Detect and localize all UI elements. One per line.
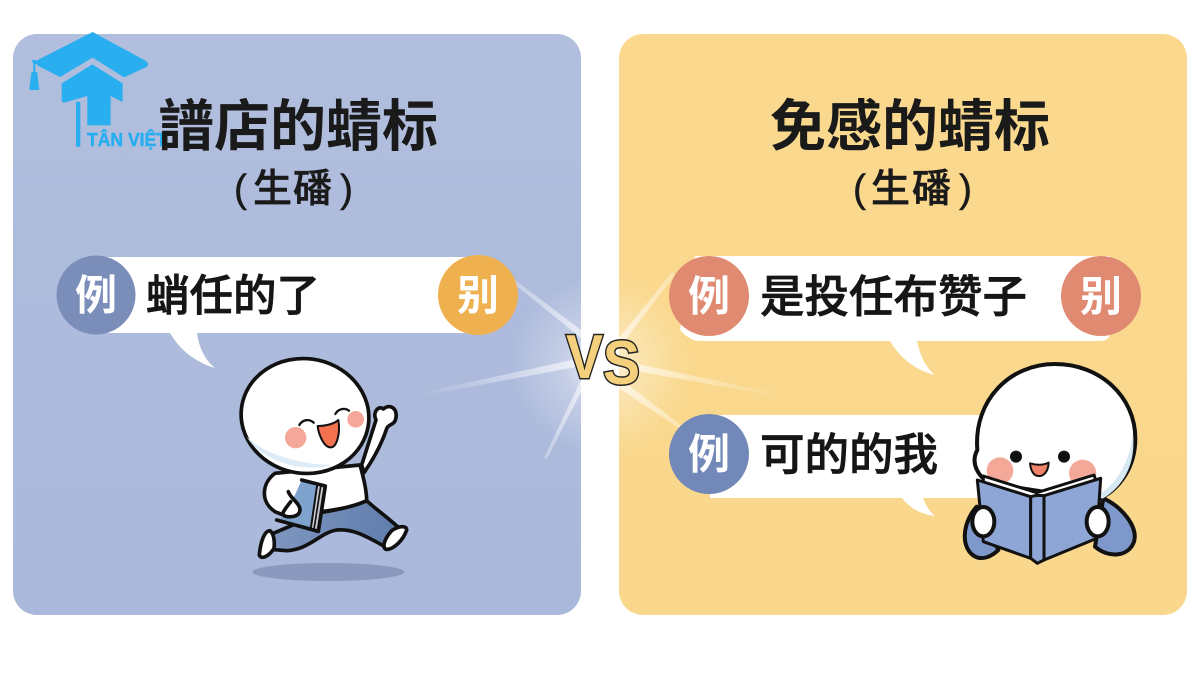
torso [264, 465, 367, 515]
label: VS: V [566, 323, 607, 392]
eyes [299, 420, 314, 425]
badge: left blue: 例 [75, 272, 117, 319]
head [975, 364, 1135, 500]
heading: left subtitle: ) [340, 168, 353, 211]
logo: Tan Viet: TÂN VIỆT [87, 129, 167, 150]
badge: left blue [56, 256, 136, 334]
badge: right red second: 别 [1080, 273, 1122, 320]
light burst behind VS [443, 272, 763, 459]
badge: right red [669, 256, 749, 336]
badge: left orange: 别 [457, 272, 499, 319]
arms [965, 507, 998, 558]
book [977, 475, 1101, 563]
callout: right top speech bubble [669, 256, 1141, 375]
badge: right red: 例 [688, 273, 730, 320]
book [277, 480, 325, 531]
shadow [252, 563, 404, 581]
head [234, 350, 376, 482]
heading: right title: 免感的蜻标 [770, 95, 1050, 158]
heading: right subtitle: 生 [871, 168, 910, 211]
badge: right red second [1061, 256, 1141, 336]
text: left bubble: 蛸任的了 [146, 273, 320, 321]
panel: left [13, 34, 581, 615]
callout: left speech bubble [56, 255, 518, 368]
heading: right subtitle: ( [853, 168, 866, 211]
heading: left subtitle: 磻 [293, 168, 332, 211]
cheeks [285, 427, 306, 448]
heading: left title: 譜店的蜻标 [158, 95, 438, 158]
trousers [270, 501, 402, 551]
heading: right subtitle: 磻 [912, 168, 951, 211]
badge: right blue: 例 [688, 431, 730, 478]
cheeks [987, 457, 1013, 484]
feet [384, 527, 407, 549]
heading: left subtitle: 生 [253, 168, 292, 211]
hands [972, 507, 994, 536]
badge: right blue [669, 414, 749, 494]
character: reading a book [965, 364, 1135, 563]
badge: left orange [438, 255, 518, 335]
text: right top bubble: 是投任布赞子 [760, 273, 1027, 322]
panel: right [619, 34, 1187, 615]
logo: Tan Viet [29, 32, 167, 150]
text: right lower bubble: 可的的我 [760, 431, 938, 480]
eyes [1011, 452, 1021, 461]
heading: left subtitle: ( [234, 168, 247, 211]
callout: right lower speech bubble [669, 414, 985, 516]
hand [283, 492, 300, 517]
character: running with book [234, 350, 407, 581]
label: VS: S [603, 329, 640, 398]
heading: right subtitle: ) [959, 168, 972, 211]
mouth [1030, 463, 1049, 476]
mouth [318, 420, 339, 447]
raised arm [362, 407, 396, 473]
